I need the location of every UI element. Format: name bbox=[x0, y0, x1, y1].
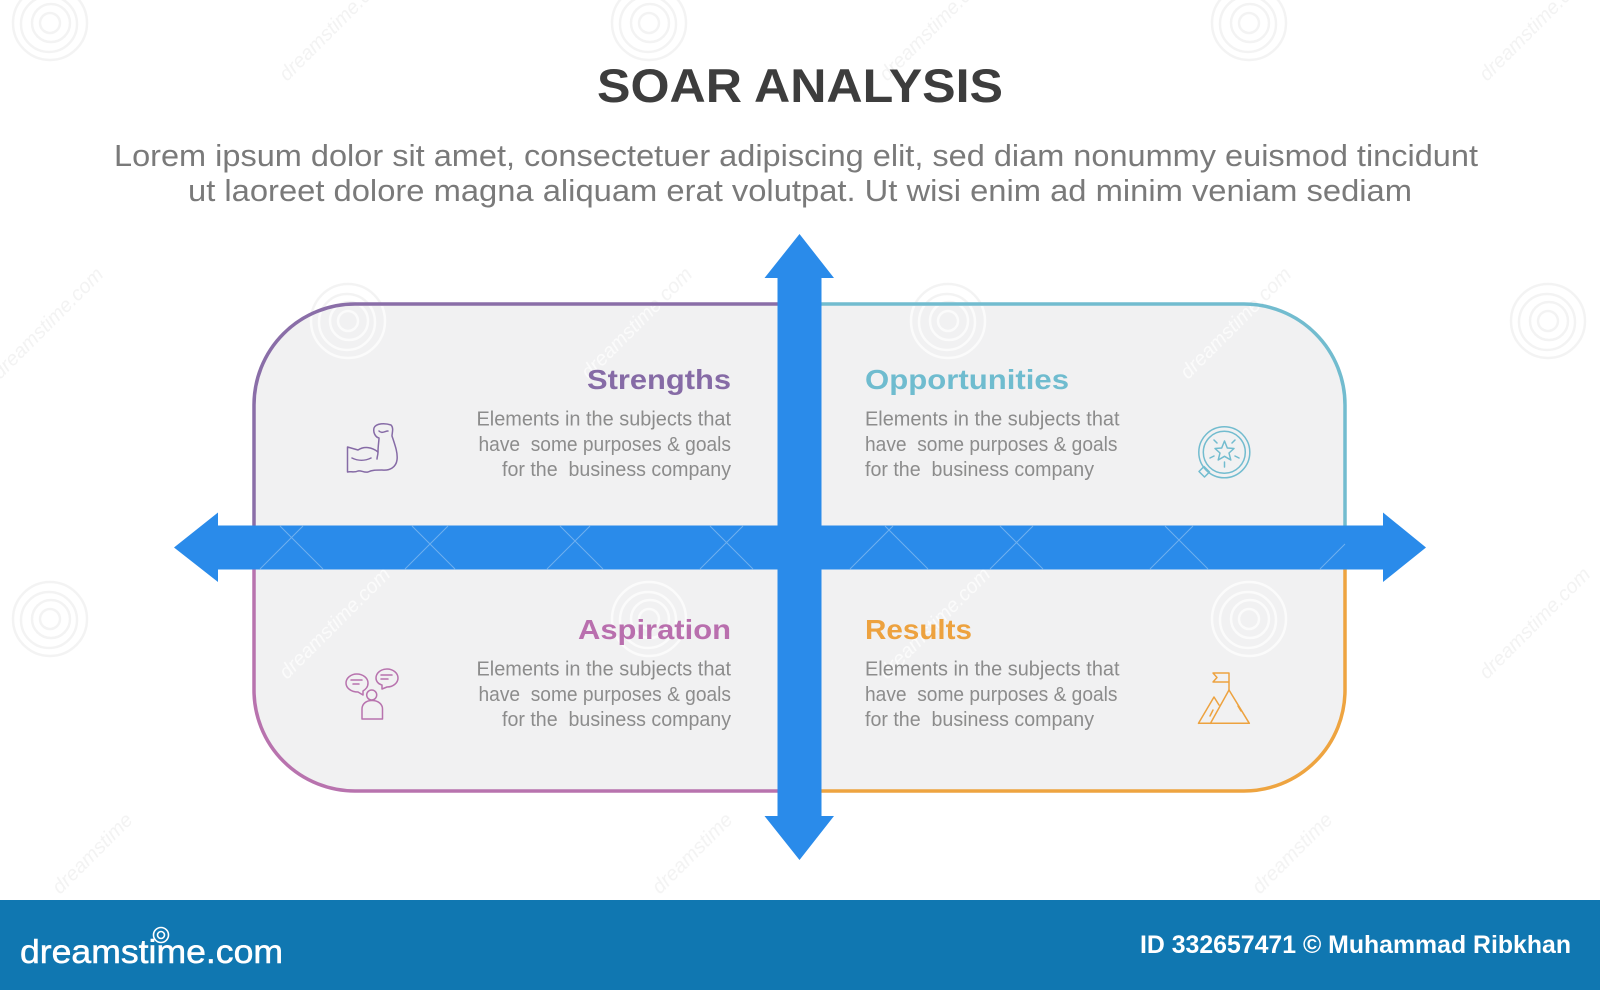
subtitle: Lorem ipsum dolor sit amet, consectetuer adipiscing elit, sed diam nonummy euismod tincidunt bbox=[114, 138, 1478, 173]
logo wordmark: dreamstime.com bbox=[20, 933, 283, 970]
watermark pattern: dreamstime.com bbox=[1475, 563, 1595, 684]
text block: aspiration: for the business company bbox=[502, 708, 732, 731]
watermark pattern: dreamstime bbox=[1248, 809, 1337, 899]
text block: results: have some purposes & goals bbox=[865, 683, 1118, 706]
heading: aspiration: Aspiration bbox=[578, 614, 731, 645]
text block: aspiration: have some purposes & goals bbox=[478, 683, 731, 706]
panel text: aspiration bbox=[476, 614, 732, 731]
text block: strengths: Elements in the subjects that bbox=[476, 408, 731, 430]
panel text: results bbox=[865, 614, 1120, 731]
text block: results bbox=[865, 658, 1120, 731]
text block: strengths: have some purposes & goals bbox=[478, 433, 731, 456]
subtitle bbox=[114, 138, 1478, 208]
arrow: horizontal double-headed bbox=[174, 512, 1426, 582]
text block: results: Elements in the subjects that bbox=[865, 658, 1120, 680]
panel: opportunities frame bbox=[821, 304, 1345, 526]
panel text: strengths bbox=[476, 364, 732, 481]
arrow: vertical double-headed bbox=[764, 234, 834, 860]
icon: person with speech bubbles bbox=[346, 669, 398, 719]
text block: aspiration bbox=[476, 658, 732, 731]
subtitle: ut laoreet dolore magna aliquam erat volutpat. Ut wisi enim ad minim veniam sediam bbox=[188, 173, 1412, 208]
icon: logo spiral bbox=[154, 928, 168, 942]
footer bar bbox=[0, 900, 1600, 990]
watermark pattern: dreamstime.com bbox=[1176, 263, 1296, 384]
heading: strengths: Strengths bbox=[587, 364, 731, 395]
text block: opportunities bbox=[865, 408, 1120, 481]
panel watermark bbox=[282, 306, 1287, 678]
watermark pattern: dreamstime bbox=[648, 809, 737, 899]
image id and author: ID 332657471 © Muhammad Ribkhan bbox=[1140, 931, 1571, 959]
panel watermark: dreamstime.com bbox=[1176, 263, 1296, 384]
text block: strengths bbox=[476, 408, 732, 481]
panel watermark: dreamstime.com bbox=[875, 563, 995, 684]
icon: star in circle bbox=[1199, 427, 1250, 478]
panel watermark: dreamstime.com bbox=[275, 563, 395, 684]
watermark pattern: dreamstime.com bbox=[577, 263, 697, 384]
text block: aspiration: Elements in the subjects that bbox=[476, 658, 731, 680]
icon: flexed arm bbox=[348, 424, 397, 472]
text block: opportunities: have some purposes & goals bbox=[865, 433, 1118, 456]
text block: opportunities: for the business company bbox=[865, 458, 1095, 481]
panel: strengths frame bbox=[254, 304, 778, 526]
heading: results: Results bbox=[865, 614, 972, 645]
panel watermark: dreamstime.com bbox=[577, 263, 697, 384]
icon: mountain with flag bbox=[1198, 673, 1249, 723]
panel text: opportunities bbox=[865, 364, 1120, 481]
text block: results: for the business company bbox=[865, 708, 1095, 731]
panel: aspiration frame bbox=[254, 569, 778, 791]
heading: opportunities: Opportunities bbox=[865, 364, 1069, 395]
text block: opportunities: Elements in the subjects that bbox=[865, 408, 1120, 430]
title: SOAR ANALYSIS bbox=[597, 59, 1003, 112]
panel: grey fill bbox=[254, 304, 1345, 791]
watermark lines on arrows bbox=[260, 526, 1345, 569]
panel: results frame bbox=[821, 569, 1345, 791]
text block: strengths: for the business company bbox=[502, 458, 732, 481]
cross arrows bbox=[174, 234, 1426, 860]
quadrant panels background bbox=[254, 263, 1345, 791]
watermark pattern: dreamstime bbox=[48, 809, 137, 899]
